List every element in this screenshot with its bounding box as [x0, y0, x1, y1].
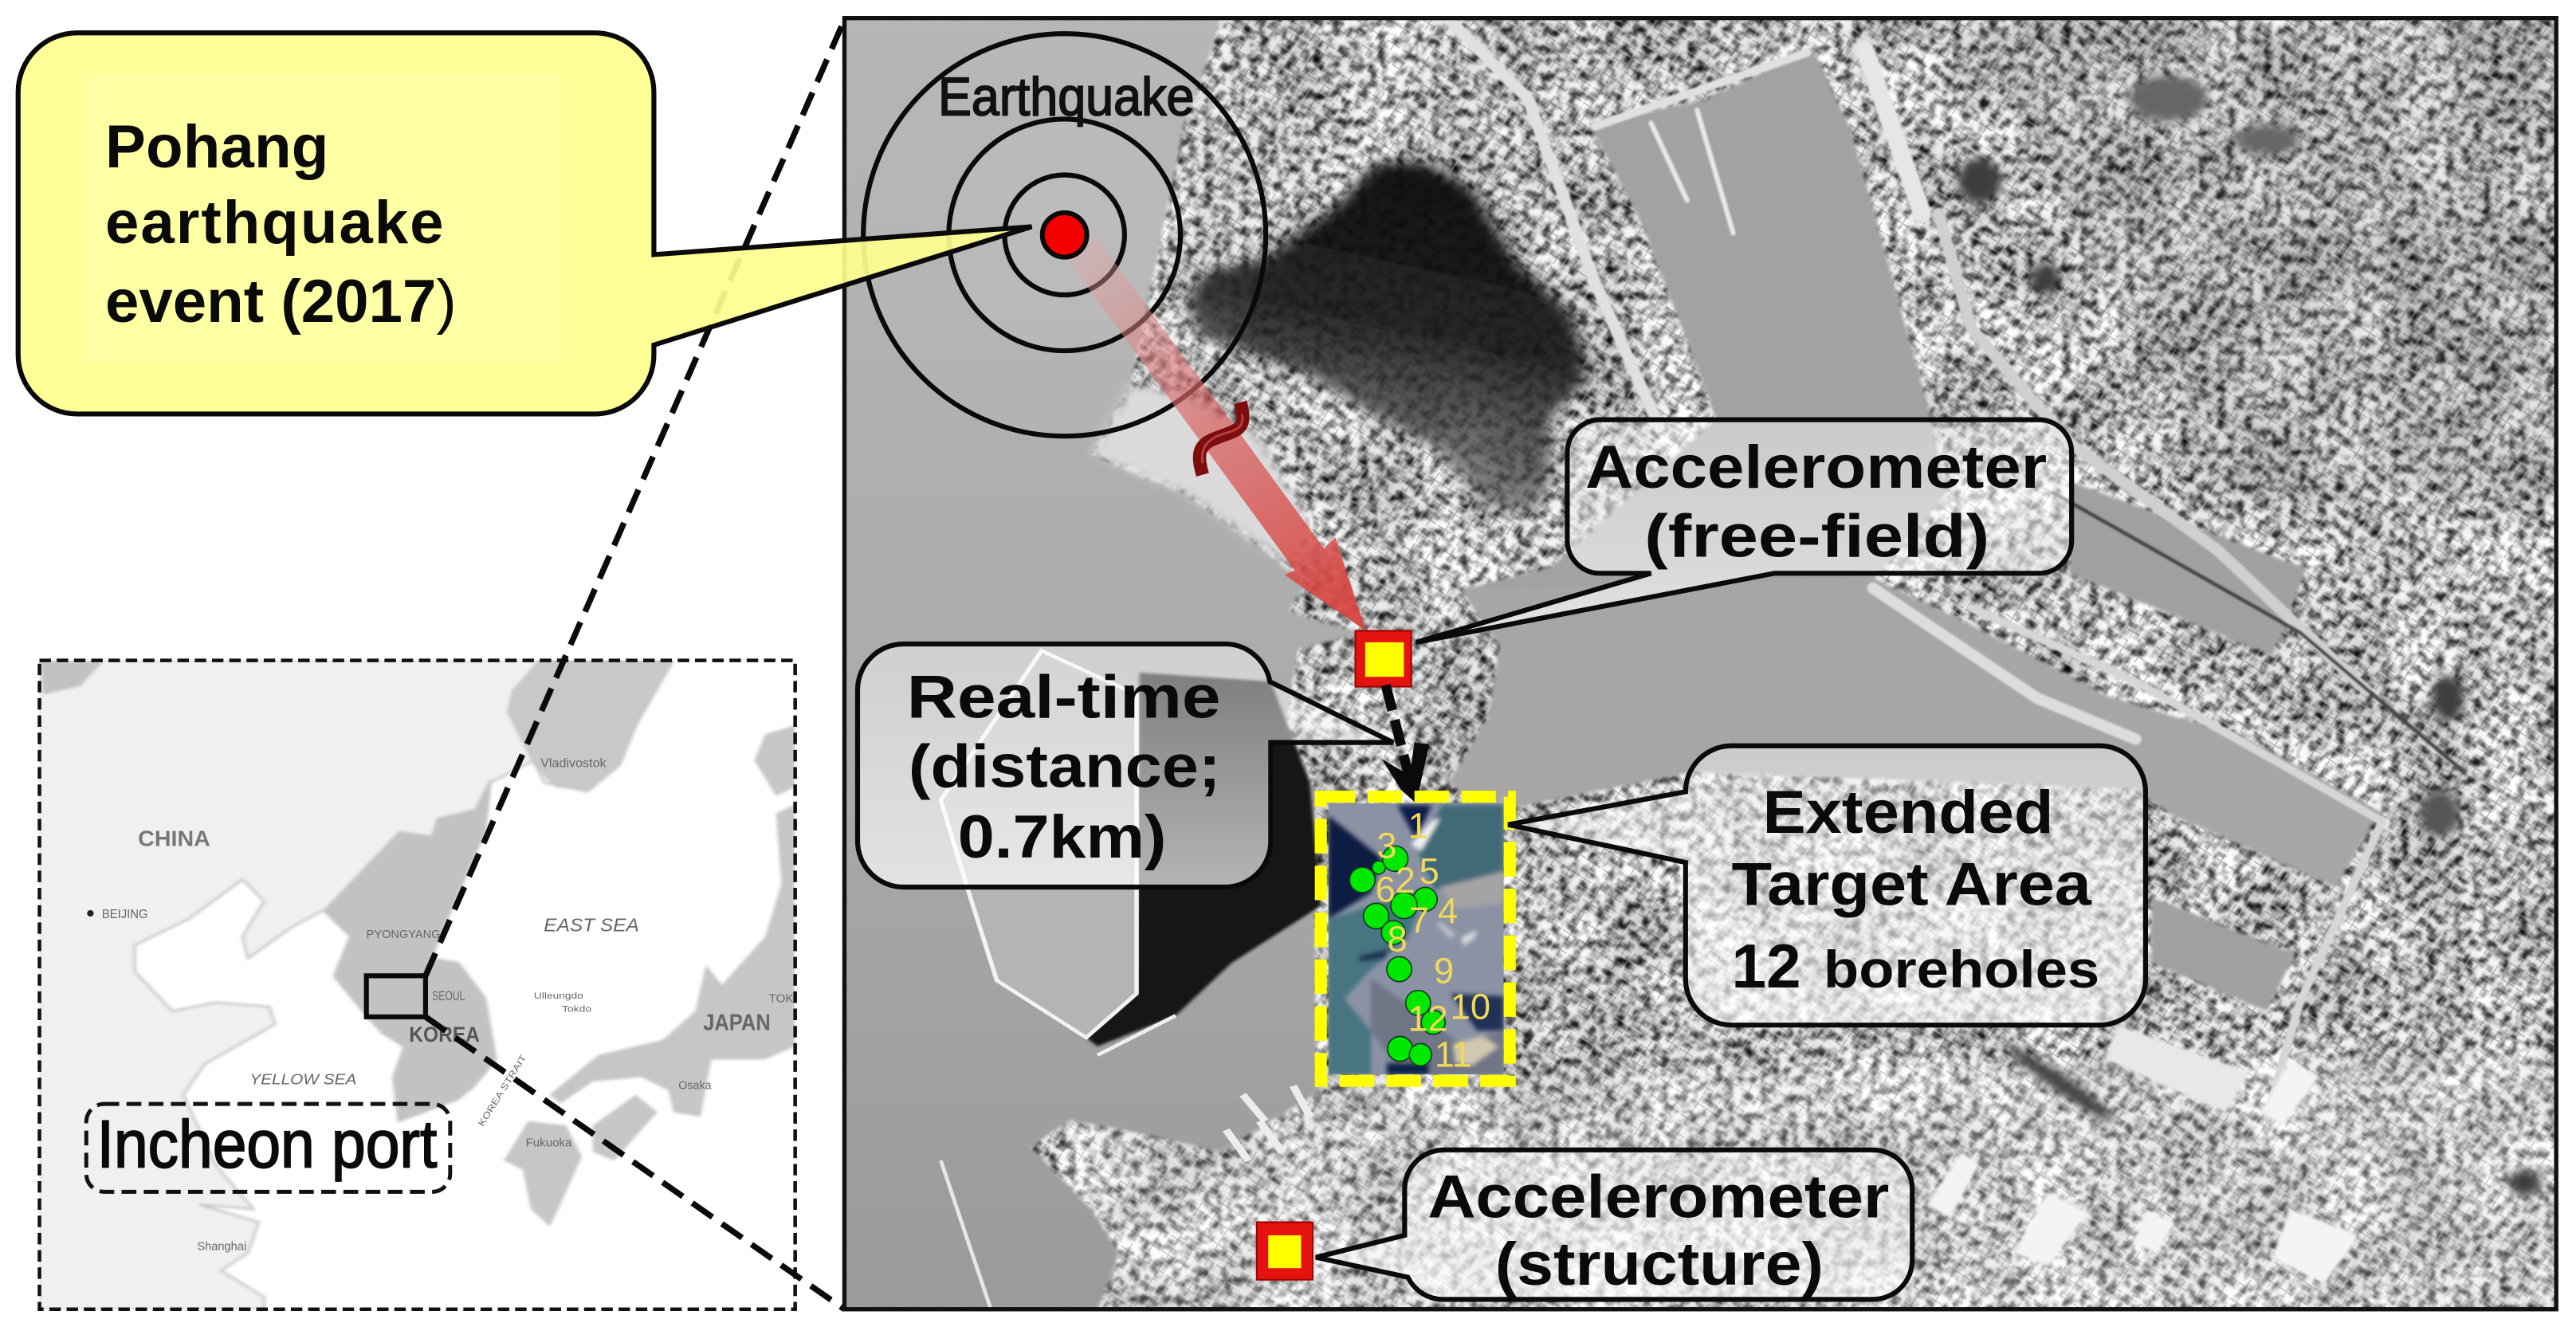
callout: accelerometer free-field: [1416, 420, 2071, 642]
callout: accelerometer structure: (structure): [1495, 1231, 1824, 1298]
borehole numbers: 6: [1376, 870, 1396, 910]
map labels: KOREA STRAIT: [477, 1054, 528, 1129]
map labels: BEIJING: [102, 908, 148, 921]
map labels: JAPAN: [703, 1010, 771, 1035]
wooded hill: [1187, 162, 1584, 516]
sensor: structure accelerometer: [1257, 1222, 1313, 1280]
bright warehouses: [1927, 1024, 2358, 1284]
earthquake label: Earthquake: [938, 66, 1195, 127]
urban land texture: [844, 18, 2556, 1309]
borehole numbers: 3: [1376, 826, 1397, 866]
dark vegetation patches: [1958, 76, 2542, 1196]
map labels: PYONGYANG: [367, 929, 440, 941]
map labels: SEOUL: [432, 989, 465, 1003]
mainland china: [37, 660, 673, 1310]
map geography: [37, 660, 795, 1310]
harbour piers and roads: [1446, 17, 2464, 1117]
incheon port label: Incheon port: [97, 1106, 437, 1181]
zoom lines: [426, 20, 844, 1309]
location box: [367, 976, 426, 1017]
callout: extended target area: Target Area: [1732, 851, 2092, 919]
borehole numbers: 4: [1438, 890, 1458, 931]
callout: extended target area: [1508, 746, 2146, 1025]
callout: pohang earthquake event: earthquake: [105, 189, 444, 257]
callout: pohang earthquake event: event (2017): [105, 268, 457, 336]
map labels: EAST SEA: [544, 915, 639, 936]
borehole dots: [1349, 846, 1445, 1066]
callout: pohang earthquake event: [18, 33, 1031, 414]
dashed arrow to target area: [1381, 685, 1429, 803]
borehole numbers: [1376, 806, 1490, 1074]
callout: accelerometer free-field: Accelerometer: [1585, 434, 2047, 501]
map labels: TOK: [769, 992, 794, 1005]
borehole numbers: 12: [1408, 998, 1448, 1038]
red propagation arrow: [1066, 237, 1366, 630]
panel: regional map inset: [37, 660, 795, 1310]
sand beach: [1092, 385, 1310, 568]
water bodies: [844, 18, 2382, 1309]
borehole numbers: 10: [1451, 986, 1490, 1027]
japan islands: [504, 725, 795, 1227]
callout: extended target area: boreholes: [1824, 940, 2099, 999]
borehole numbers: 9: [1434, 950, 1454, 991]
borehole numbers: 7: [1409, 900, 1429, 940]
callout: extended target area: Extended: [1763, 779, 2053, 846]
borehole numbers: 11: [1435, 1034, 1472, 1074]
map labels: Tokdo: [562, 1005, 591, 1015]
map labels: CHINA: [138, 826, 210, 850]
map labels: [87, 757, 794, 1254]
map labels: Shanghai: [197, 1241, 246, 1254]
callout: real-time distance: [858, 644, 1393, 887]
panel: satellite view of port: [844, 17, 2556, 1310]
map labels: YELLOW SEA: [249, 1070, 356, 1087]
breakwater and dark shadow: [940, 650, 1321, 1310]
break mark: [1200, 402, 1243, 475]
borehole numbers: 1: [1408, 806, 1428, 846]
earthquake rings: [863, 33, 1266, 436]
borehole numbers: 8: [1388, 918, 1408, 959]
map labels: Vladivostok: [540, 757, 607, 771]
callout: extended target area: 12: [1732, 931, 1801, 1001]
epicentre dot: [1043, 213, 1087, 257]
map labels: Fukuoka: [526, 1137, 572, 1150]
sensor: free-field accelerometer: [1356, 630, 1412, 687]
callout: pohang earthquake event: Pohang: [105, 113, 328, 181]
borehole numbers: 5: [1420, 850, 1439, 891]
callout: accelerometer free-field: (free-field): [1644, 503, 1989, 571]
map labels: Osaka: [678, 1080, 713, 1093]
callout: real-time distance: (distance;: [909, 732, 1220, 800]
callout: accelerometer structure: Accelerometer: [1427, 1163, 1889, 1231]
callout: accelerometer structure: [1316, 1150, 1912, 1299]
map labels: KOREA: [409, 1023, 480, 1046]
colour aerial image: [1329, 803, 1504, 1074]
target area with borehole image: [1321, 797, 1510, 1081]
korean peninsula: [324, 778, 496, 1121]
callout: real-time distance: 0.7km): [958, 803, 1166, 871]
borehole numbers: 2: [1396, 860, 1416, 901]
yellow dashed border: [1321, 797, 1510, 1081]
panel frame: [844, 18, 2556, 1309]
callout: real-time distance: Real-time: [907, 664, 1220, 732]
dashed map frame: [40, 661, 795, 1309]
map labels: Ulleungdo: [534, 991, 583, 1001]
russia coast: [507, 660, 673, 791]
